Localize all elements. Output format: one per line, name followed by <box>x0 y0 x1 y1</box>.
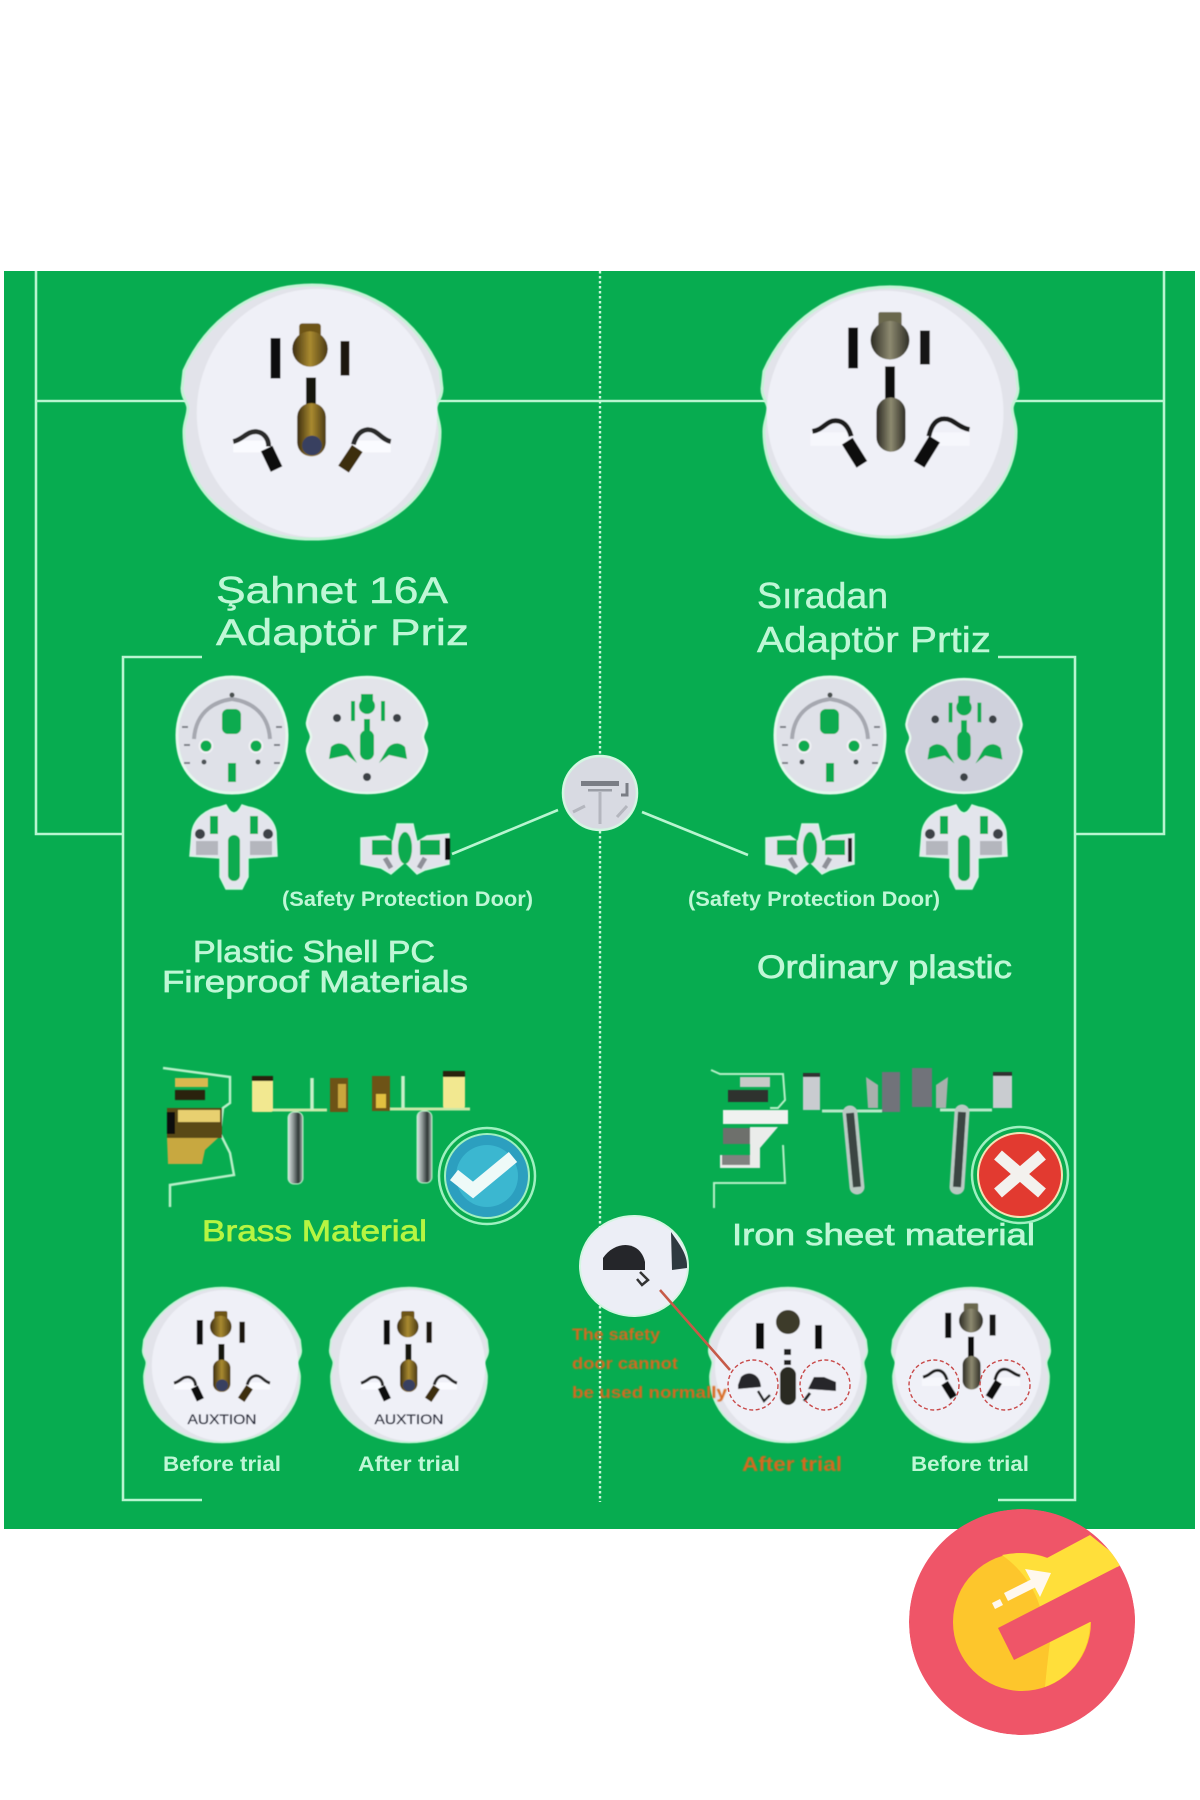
small socket: before trial ordinary <box>892 1288 1050 1442</box>
red note: safety door cannot be used <box>572 1325 728 1402</box>
panel: green background <box>4 271 1195 1529</box>
T piece left <box>190 805 277 889</box>
zoom circle: safety door detail <box>563 756 637 830</box>
front plate left <box>307 677 427 793</box>
heading: Sıradan: Sıradan <box>757 575 888 616</box>
label: after trial damaged: After trial <box>742 1454 842 1476</box>
safety door right <box>766 824 854 874</box>
heading: Adaptör Priz left: Adaptör Priz <box>216 612 469 653</box>
label: Iron sheet material: Iron sheet material <box>732 1217 1035 1252</box>
label: safety door right: (Safety Protection Door) <box>688 888 940 911</box>
T piece right <box>920 805 1007 889</box>
red note: safety door cannot be used: door cannot <box>572 1354 678 1373</box>
right plastic parts <box>766 677 1022 889</box>
label: safety door left: (Safety Protection Door) <box>282 888 533 911</box>
icon: check mark <box>439 1128 535 1224</box>
heading: Adaptör Prtiz right: Adaptör Prtiz <box>757 619 991 660</box>
small socket: after trial left <box>330 1288 488 1442</box>
left plastic parts <box>177 677 450 889</box>
red pointer line <box>660 1290 730 1370</box>
red note: safety door cannot be used: The safety <box>572 1325 661 1344</box>
label: Brass Material: Brass Material <box>202 1215 427 1248</box>
brand text: AUXTION <box>188 1411 256 1427</box>
big socket: ordinary <box>762 287 1018 537</box>
safety door left <box>361 824 450 874</box>
brand text: AUXTION <box>374 1411 444 1427</box>
connector frame lines <box>36 271 1164 1502</box>
red note: safety door cannot be used: be used normally <box>572 1383 728 1402</box>
back plate right <box>775 677 885 793</box>
small socket: before trial left <box>143 1288 301 1442</box>
icon: G logo badge <box>909 1509 1140 1735</box>
small socket: after trial damaged <box>709 1288 867 1442</box>
front plate right <box>906 679 1022 793</box>
label: Ordinary plastic: Ordinary plastic <box>757 949 1012 985</box>
label: after trial left: After trial <box>358 1453 460 1476</box>
brass contact parts <box>163 1068 470 1207</box>
iron contact parts <box>711 1068 1012 1208</box>
label: Fireproof Materials: Fireproof Materials <box>162 964 468 999</box>
icon: cross mark <box>972 1127 1068 1223</box>
heading: Şahnet 16A: Şahnet 16A <box>216 570 448 611</box>
zoom circle: damaged door <box>580 1216 688 1316</box>
label: before trial ordinary: Before trial <box>911 1453 1029 1476</box>
back plate left <box>177 677 287 793</box>
label: before trial left: Before trial <box>163 1453 281 1476</box>
big socket: Şahnet <box>182 285 442 539</box>
label: Plastic Shell PC: Plastic Shell PC <box>193 934 435 969</box>
dashed highlight circles <box>728 1360 1030 1410</box>
